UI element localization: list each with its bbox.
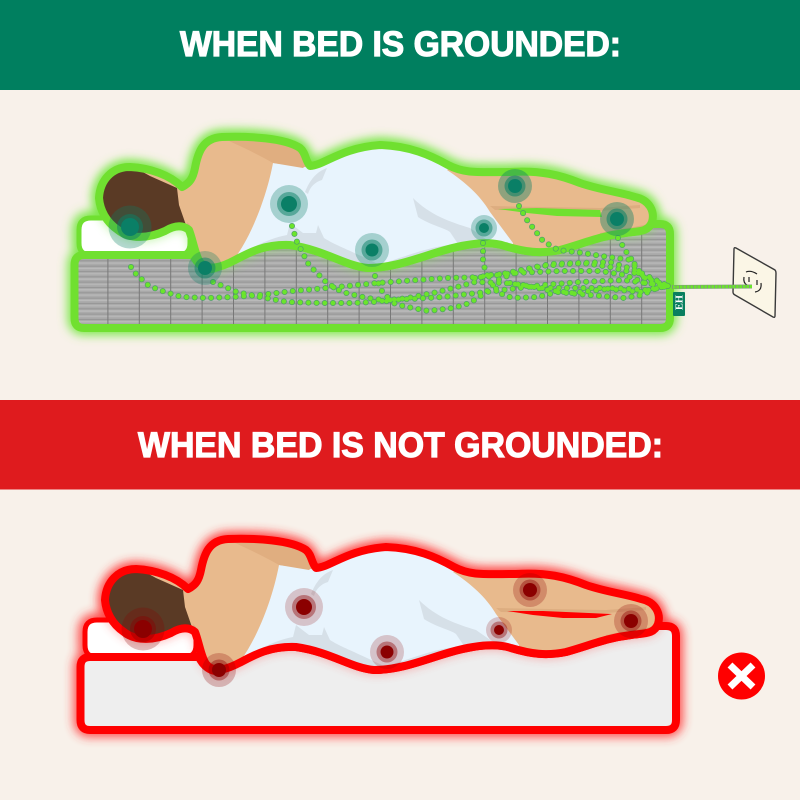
label: EH tag xyxy=(673,292,686,316)
outer red glow xyxy=(80,539,676,730)
icon: red X xyxy=(718,652,765,700)
gap between arm and leg xyxy=(507,611,612,618)
sleeping person xyxy=(101,534,663,674)
dotted current paths xyxy=(131,206,668,311)
ground wire xyxy=(672,284,752,289)
sleeping person xyxy=(95,132,657,272)
body outline xyxy=(99,137,653,268)
pillow outline xyxy=(85,620,196,657)
icon: wall outlet xyxy=(733,248,776,317)
gap between arm and leg xyxy=(498,208,602,217)
inner red glow xyxy=(105,539,659,670)
inner green glow xyxy=(99,137,653,268)
hotspot: foot xyxy=(600,202,634,236)
panel: grounded bed illustration xyxy=(74,130,680,328)
label: EH tag: EH xyxy=(674,295,686,310)
header: grounded xyxy=(0,0,800,90)
hotspot: head xyxy=(122,608,164,650)
hotspot: shoulder xyxy=(202,653,236,687)
hotspot: foot xyxy=(614,604,648,638)
hotspot: hip xyxy=(471,215,497,241)
hotspot: knee xyxy=(513,573,547,607)
mattress with grounded grid xyxy=(74,224,670,328)
panel: not grounded bed illustration xyxy=(80,532,686,730)
hotspot: head xyxy=(108,206,152,248)
pillow outline xyxy=(79,218,190,255)
hotspot: upper back xyxy=(270,185,308,223)
title: when bed is not grounded: WHEN BED IS NOT GROUNDED: xyxy=(138,426,663,465)
hotspot: knee xyxy=(498,169,532,203)
outer green glow xyxy=(74,137,670,328)
pillow xyxy=(85,620,196,657)
mattress outline xyxy=(74,224,670,328)
mattress xyxy=(80,626,676,730)
hotspot: waist xyxy=(370,635,404,669)
mattress outline xyxy=(80,626,676,730)
header: not grounded xyxy=(0,400,800,490)
body outline xyxy=(105,539,659,670)
hotspot: shoulder xyxy=(188,251,222,285)
title: when bed is grounded: WHEN BED IS GROUNDED: xyxy=(180,25,621,64)
hotspot: waist xyxy=(355,233,389,267)
hotspot: hip xyxy=(486,617,512,643)
hotspot: upper back xyxy=(285,588,323,626)
pillow xyxy=(79,218,190,255)
